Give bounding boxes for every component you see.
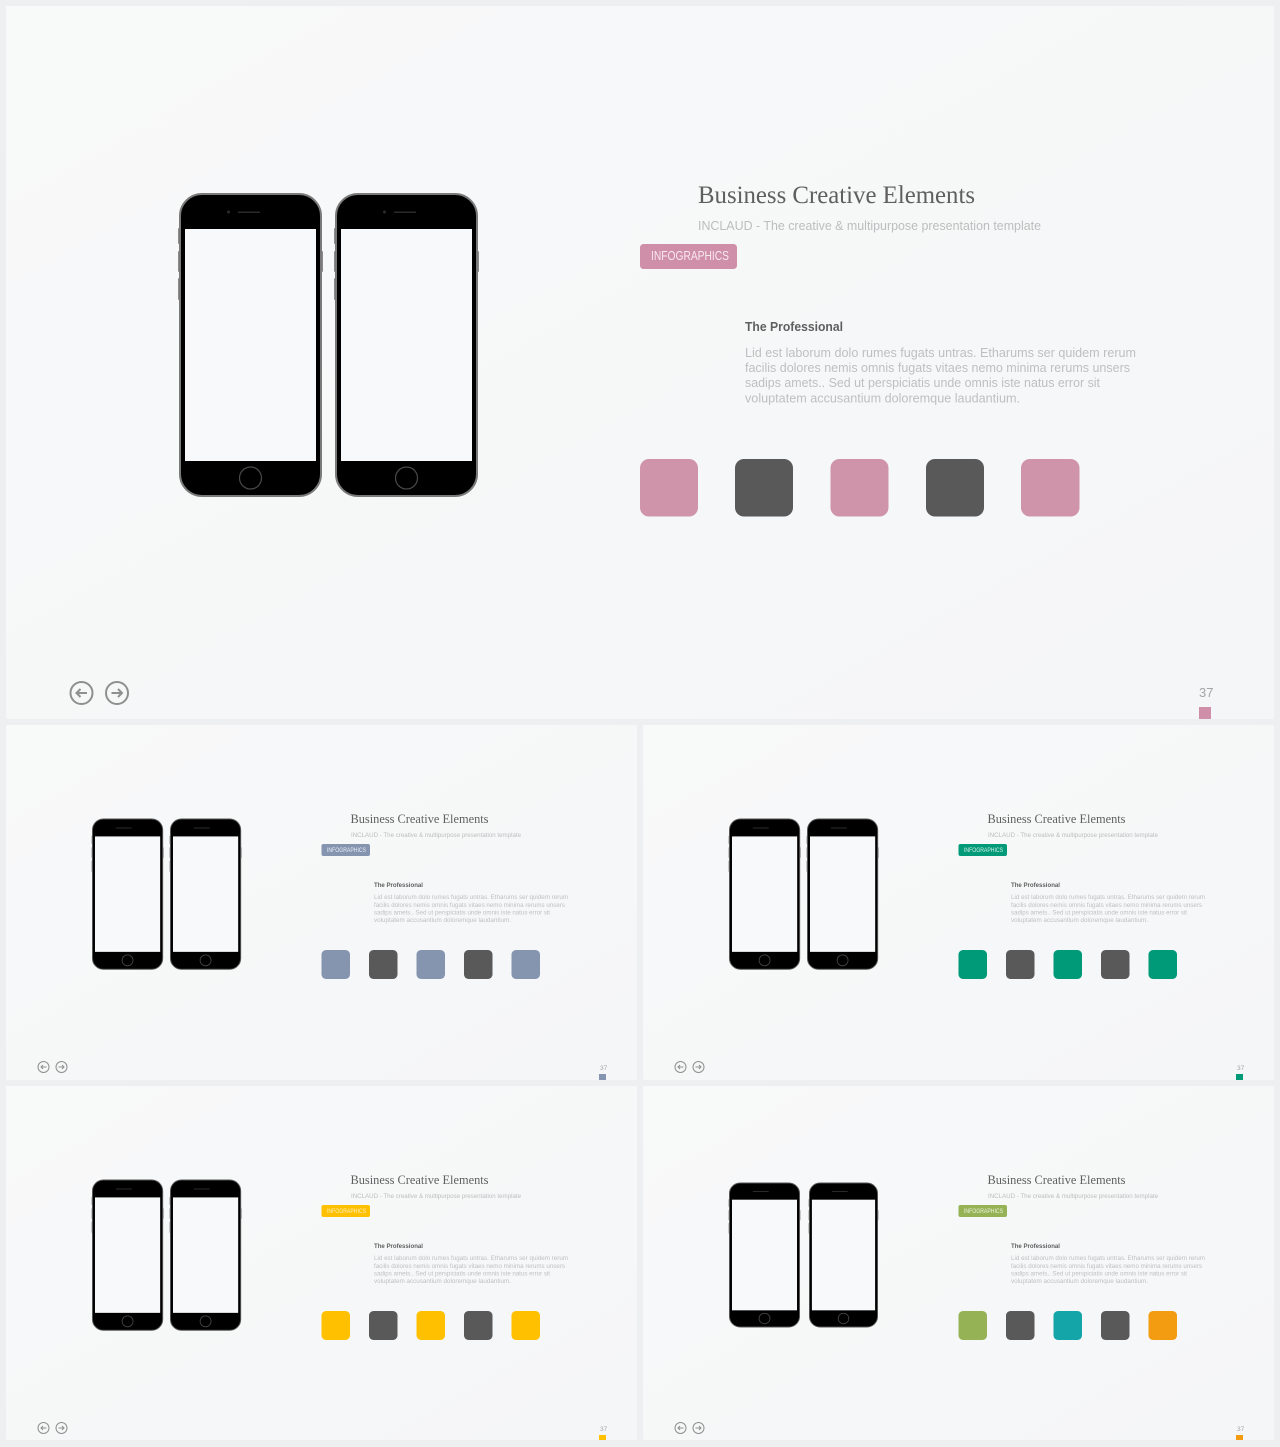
page number: 37 xyxy=(1237,1426,1245,1433)
subtitle: INCLAUD - The creative & multipurpose presentation template xyxy=(351,1193,521,1200)
tag: infographics: INFOGRAPHICS xyxy=(964,848,1003,854)
body text: voluptatem accusantium doloremque laudantium. xyxy=(1011,1278,1148,1285)
subtitle: INCLAUD - The creative & multipurpose presentation template xyxy=(698,218,1041,233)
tag: infographics xyxy=(640,244,737,269)
icon: next arrow xyxy=(106,682,128,704)
tag: infographics xyxy=(322,1205,370,1217)
body text: Lid est laborum dolo rumes fugats untras. Etharums ser quidem rerum xyxy=(374,894,568,901)
icon: previous arrow xyxy=(38,1062,49,1072)
tag: infographics xyxy=(322,844,370,856)
icon: phones xyxy=(92,819,242,969)
page marker xyxy=(599,1074,606,1080)
body text: sadips amets.. Sed ut perspiciatis unde omnis iste natus error sit xyxy=(374,910,550,916)
page marker xyxy=(1236,1435,1243,1440)
colour squares xyxy=(958,950,1177,979)
body text: facilis dolores nemis omnis fugats vitaes nemo minima rerums unsers xyxy=(374,1263,565,1270)
page number: 37 xyxy=(1199,685,1213,700)
subtitle: INCLAUD - The creative & multipurpose presentation template xyxy=(988,832,1158,839)
colour squares xyxy=(640,459,1080,516)
colour squares xyxy=(958,1311,1177,1340)
heading: the professional: The Professional xyxy=(374,1243,423,1250)
body text: Lid est laborum dolo rumes fugats untras. Etharums ser quidem rerum xyxy=(745,345,1136,360)
panel: blue slide xyxy=(6,725,637,1080)
body text xyxy=(745,345,1136,406)
subtitle: INCLAUD - The creative & multipurpose presentation template xyxy=(988,1193,1158,1200)
icon: previous arrow xyxy=(675,1422,686,1434)
colour squares xyxy=(322,950,540,979)
body text: Lid est laborum dolo rumes fugats untras. Etharums ser quidem rerum xyxy=(1011,894,1205,901)
icon: phones xyxy=(729,1183,878,1327)
heading: the professional: The Professional xyxy=(1011,1243,1060,1250)
body text: voluptatem accusantium doloremque laudantium. xyxy=(374,1278,511,1285)
heading: the professional: The Professional xyxy=(374,882,423,889)
icon: previous arrow xyxy=(675,1062,686,1072)
panel: multicolour slide xyxy=(643,1086,1274,1440)
body text: voluptatem accusantium doloremque laudantium. xyxy=(1011,917,1148,924)
heading: the professional: The Professional xyxy=(1011,882,1060,889)
body text: facilis dolores nemis omnis fugats vitaes nemo minima rerums unsers xyxy=(1011,902,1202,909)
icon: previous arrow xyxy=(38,1422,49,1434)
panel: main slide xyxy=(6,6,1274,719)
body text: sadips amets.. Sed ut perspiciatis unde omnis iste natus error sit xyxy=(374,1270,550,1278)
icon: previous arrow xyxy=(70,682,92,704)
body text: Lid est laborum dolo rumes fugats untras. Etharums ser quidem rerum xyxy=(1011,1255,1205,1262)
body text xyxy=(374,894,568,924)
body text xyxy=(1011,894,1205,924)
icon: phone left xyxy=(178,194,323,496)
colour squares xyxy=(322,1311,540,1340)
body text xyxy=(1011,1255,1205,1285)
panel: yellow slide xyxy=(6,1086,637,1440)
page marker xyxy=(1199,707,1211,719)
body text: facilis dolores nemis omnis fugats vitaes nemo minima rerums unsers xyxy=(1011,1263,1202,1270)
page marker xyxy=(599,1435,606,1440)
body text: voluptatem accusantium doloremque laudantium. xyxy=(745,390,1020,406)
icon: next arrow xyxy=(56,1062,67,1072)
title: Business Creative Elements xyxy=(988,812,1126,826)
heading: the professional: The Professional xyxy=(745,319,843,334)
icon: phones xyxy=(92,1180,242,1330)
icon: next arrow xyxy=(56,1422,67,1434)
tag: infographics: INFOGRAPHICS xyxy=(327,1209,366,1215)
page number: 37 xyxy=(600,1426,608,1433)
title: Business Creative Elements xyxy=(350,1173,489,1187)
icon: next arrow xyxy=(693,1062,704,1072)
icon: phone right xyxy=(334,194,479,496)
body text: Lid est laborum dolo rumes fugats untras. Etharums ser quidem rerum xyxy=(374,1255,568,1262)
title: Business Creative Elements xyxy=(350,812,489,826)
tag: infographics: INFOGRAPHICS xyxy=(964,1209,1003,1215)
panel: green slide xyxy=(643,725,1274,1080)
page marker xyxy=(1236,1074,1243,1080)
body text: facilis dolores nemis omnis fugats vitaes nemo minima rerums unsers xyxy=(374,902,565,909)
page number: 37 xyxy=(600,1065,608,1072)
icon: next arrow xyxy=(693,1422,704,1434)
tag: infographics xyxy=(958,844,1007,856)
body text: voluptatem accusantium doloremque laudantium. xyxy=(374,917,511,924)
title: Business Creative Elements xyxy=(698,182,975,209)
tag: infographics: INFOGRAPHICS xyxy=(327,848,366,854)
page number: 37 xyxy=(1237,1065,1245,1072)
body text: sadips amets.. Sed ut perspiciatis unde omnis iste natus error sit xyxy=(745,375,1100,390)
body text: facilis dolores nemis omnis fugats vitaes nemo minima rerums unsers xyxy=(745,360,1130,375)
body text: sadips amets.. Sed ut perspiciatis unde omnis iste natus error sit xyxy=(1011,1270,1187,1278)
title: Business Creative Elements xyxy=(988,1173,1126,1187)
subtitle: INCLAUD - The creative & multipurpose presentation template xyxy=(351,832,521,839)
body text xyxy=(374,1255,568,1285)
icon: phones xyxy=(729,819,879,969)
tag: infographics xyxy=(958,1205,1007,1217)
tag: infographics: INFOGRAPHICS xyxy=(651,249,729,263)
body text: sadips amets.. Sed ut perspiciatis unde omnis iste natus error sit xyxy=(1011,910,1187,916)
